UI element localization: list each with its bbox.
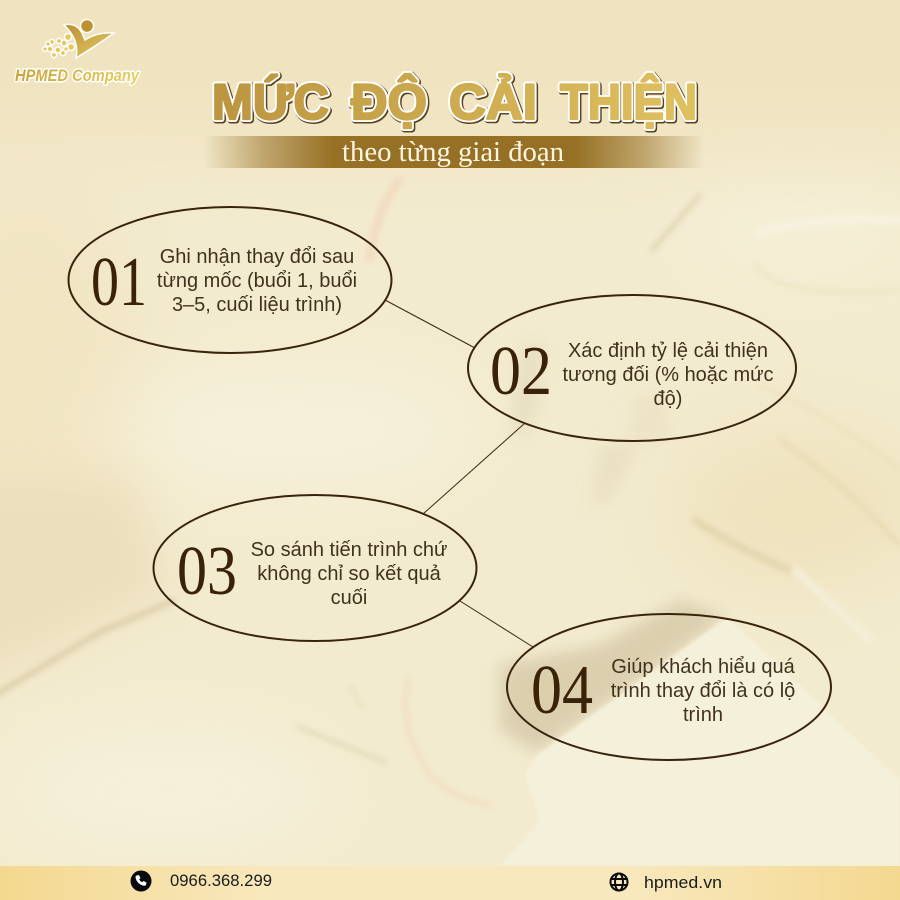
text 01: Ghi nhận thay đổi sau (160, 246, 354, 268)
subtitle band (203, 136, 705, 168)
title: MỨC (212, 74, 329, 130)
step 02 (468, 295, 796, 441)
icon: logo mark (43, 20, 114, 58)
number 04: 04 (531, 652, 593, 729)
step 04 (507, 614, 831, 760)
logo wordmark: HPMED Company (15, 66, 140, 85)
title: ĐỘ (352, 74, 428, 131)
text 04: trình (683, 704, 723, 726)
text 03: không chỉ so kết quả (257, 563, 442, 585)
icon: globe (610, 874, 628, 890)
text 03: cuối (331, 587, 367, 609)
title: THIỆN (560, 74, 697, 130)
step 01 (68, 207, 392, 353)
text 01: từng mốc (buổi 1, buổi (157, 270, 357, 292)
website: hpmed.vn (644, 873, 722, 892)
title: ĐỘ (351, 73, 427, 130)
text 01: 3–5, cuối liệu trình) (172, 294, 342, 316)
title: MỨC (212, 74, 329, 130)
pale patch lower right (500, 617, 900, 866)
creases (298, 180, 900, 805)
lash shadows (500, 340, 727, 753)
step 03 (154, 495, 476, 641)
title: THIỆN (561, 75, 698, 131)
subtitle band: theo từng giai đoạn (342, 137, 564, 168)
number 02: 02 (490, 333, 552, 410)
phone number: 0966.368.299 (170, 871, 272, 890)
number 01: 01 (91, 244, 147, 321)
title: CẢI (449, 74, 537, 130)
text 02: độ) (654, 388, 682, 410)
title: MỨC (213, 75, 330, 131)
logo: HPMED Company (15, 20, 140, 85)
number 03: 03 (177, 533, 237, 610)
text 02: tương đối (% hoặc mức (562, 364, 774, 386)
title: ĐỘ (351, 73, 427, 130)
text 02: Xác định tỷ lệ cải thiện (568, 340, 768, 362)
text 04: Giúp khách hiểu quá (611, 656, 796, 678)
title (212, 73, 698, 131)
text 03: So sánh tiến trình chứ (251, 539, 447, 561)
text 04: trình thay đổi là có lộ (611, 680, 795, 702)
tan region lower left (0, 480, 170, 700)
title: THIỆN (560, 74, 697, 130)
connector lines (385, 300, 533, 647)
icon: phone (130, 870, 152, 892)
brow crease lower left (0, 600, 175, 695)
title: CẢI (449, 74, 537, 130)
title: CẢI (450, 75, 538, 131)
footer bar (0, 866, 900, 900)
